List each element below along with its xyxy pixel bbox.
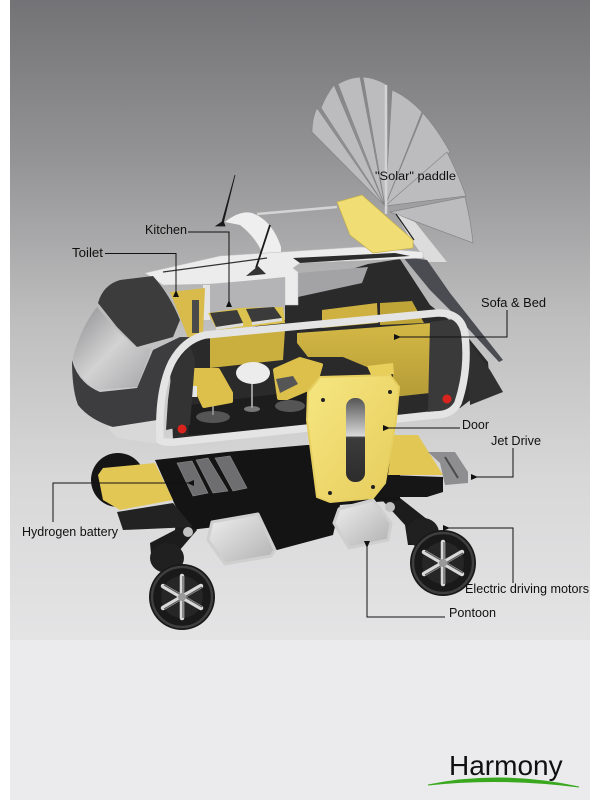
logo: Harmony: Harmony	[449, 750, 563, 781]
right yellow tray	[388, 435, 443, 475]
front wheel arm left	[150, 505, 197, 565]
label: pontoon: Pontoon	[449, 606, 496, 620]
rear wheel	[91, 453, 145, 507]
label: jet drive	[477, 434, 541, 477]
wall plate	[180, 386, 197, 397]
label: kitchen: Kitchen	[145, 223, 187, 237]
red light left	[178, 424, 186, 434]
red light right	[442, 394, 452, 404]
nose cap	[98, 276, 180, 347]
label: door	[389, 418, 489, 432]
label: sofa and bed: Sofa & Bed	[481, 296, 546, 310]
front wheel right	[410, 530, 476, 596]
lower background band	[10, 640, 590, 800]
exploded vehicle illustration	[72, 77, 503, 630]
label: hydrogen battery	[22, 483, 188, 539]
right chair	[275, 359, 321, 412]
chassis and batteries	[98, 435, 468, 573]
antenna	[216, 175, 235, 226]
frame ring	[160, 313, 466, 442]
left chair	[192, 370, 231, 423]
label: electric driving motors	[449, 528, 589, 596]
door	[307, 375, 399, 502]
background panel	[10, 0, 590, 640]
white underside	[107, 420, 160, 444]
motor right	[407, 518, 439, 548]
pontoon left	[208, 514, 275, 564]
jet drive	[428, 452, 468, 485]
label: jet drive: Jet Drive	[491, 434, 541, 448]
battery plates	[177, 456, 247, 496]
toilet panel	[170, 288, 205, 338]
roof frame	[145, 225, 423, 305]
kitchen units and sinks	[208, 307, 285, 368]
pontoon right	[334, 500, 391, 548]
label: kitchen	[145, 223, 229, 301]
logo: Harmony	[428, 750, 579, 787]
lower nose	[72, 337, 190, 427]
label: toilet	[72, 246, 176, 291]
left dark tray	[117, 503, 193, 530]
left yellow tray	[98, 463, 173, 510]
label: toilet: Toilet	[72, 246, 104, 260]
front wheel arm right	[382, 498, 428, 545]
lounge floor	[188, 390, 308, 435]
window	[298, 267, 368, 297]
right dark tray	[380, 475, 443, 497]
vehicle body	[72, 225, 503, 444]
label: hydrogen battery: Hydrogen battery	[22, 525, 119, 539]
sofa and bed	[297, 301, 432, 397]
arm knuckles	[183, 502, 395, 537]
windshield	[73, 307, 152, 390]
raised rear hatch	[396, 214, 503, 362]
label: solar paddle: "Solar" paddle	[375, 171, 456, 183]
label: door: Door	[462, 418, 489, 432]
table	[236, 362, 270, 412]
black platform	[155, 445, 400, 550]
front wheel left	[149, 564, 215, 630]
solar panel base	[337, 195, 413, 253]
label: electric driving motors: Electric driving motors	[465, 582, 589, 596]
roof arch and rod	[225, 207, 337, 278]
interior dark back wall	[170, 259, 490, 440]
motor left	[150, 543, 184, 573]
rear vent	[467, 340, 503, 405]
label: pontoon	[367, 547, 496, 620]
frame side panels	[166, 345, 195, 430]
solar paddle fan	[312, 77, 473, 243]
label: sofa and bed	[400, 296, 546, 337]
kitchen wall	[205, 277, 285, 315]
